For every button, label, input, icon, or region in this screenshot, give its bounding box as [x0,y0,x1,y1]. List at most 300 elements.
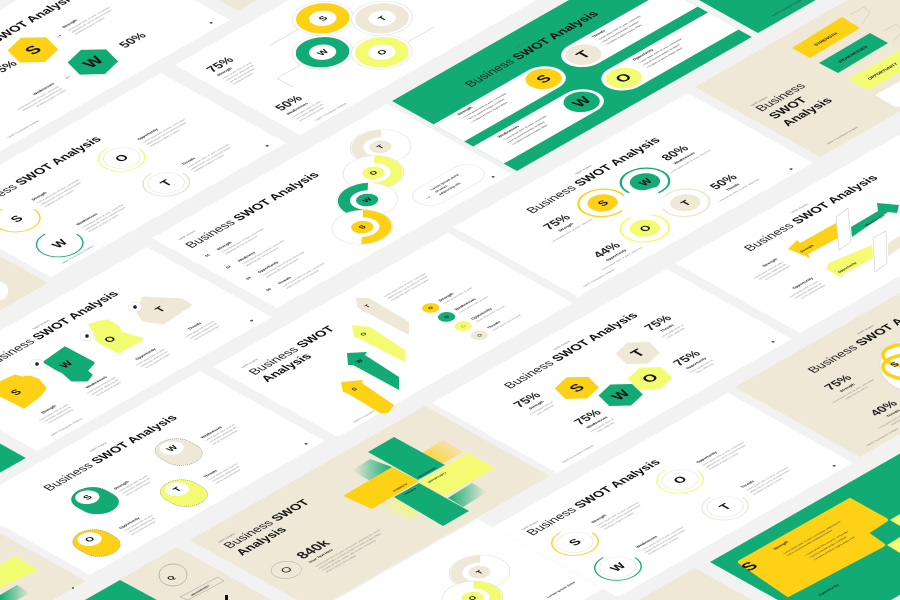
legend opportunity: Lorem ipsum dolor sit amet [474,305,506,323]
text threats: consectetur adipiscing elit, [210,465,241,483]
half ring W: W [360,196,374,204]
strength text: sed do eiusmod tempor [763,265,791,281]
stat strength: 75% [821,373,855,392]
hexagon T: T [628,347,649,360]
weaknesses stat: Weaknesses [32,82,56,96]
stacked arrow chart [341,298,409,413]
page number [265,145,269,147]
pill S: S [81,493,95,501]
text weaknesses: Weaknesses [75,213,99,226]
text strength: Lorem ipsum dolor sit amet, [117,474,150,493]
label: SWOT Analysis [574,164,594,175]
tag strength: STRENGTH [392,483,409,492]
ring W [280,28,365,76]
title: Business [752,81,809,113]
text strength: adipiscing elit, sed do eiusmod tempor [39,181,82,206]
text threats: adipiscing elit, sed do eiusmod tempor [189,146,232,170]
footer: SWOT Presentation Template [825,125,860,145]
text strength: Strength [591,514,608,524]
stat weaknesses: Lorem ipsum dolor sit [589,418,615,432]
callout text: Lorem ipsum dolor [546,581,577,599]
footer: SWOT Presentation Template [6,119,41,139]
panel: green four pills slide [392,0,752,171]
stacked card [880,339,900,391]
arrow S: S [351,387,360,392]
tag opportunity: OPPORTUNITY [866,62,899,81]
stat weaknesses: 75% [571,408,605,427]
ring T: T [376,14,389,22]
stat threats: amet, adipiscing [666,327,686,339]
text threats: Lorem ipsum dolor sit amet, [207,462,239,481]
piece knob O [80,331,94,341]
pill O: Opportunity [632,48,655,61]
text weaknesses [75,200,132,233]
hexagon W [58,42,127,81]
text strength: Strength [31,191,49,201]
hexagon O [620,361,680,395]
hexagon T [608,336,668,370]
text weaknesses: Lorem ipsum dolor sit amet, [85,376,118,394]
title: Business SWOT Analysis [182,170,323,250]
stat strength: Strength [528,400,546,410]
legend threats: Threats [486,321,502,329]
text weaknesses: Lorem ipsum dolor sit amet, consectetur [80,203,125,229]
icon circle: Q [165,574,177,581]
title: Business SWOT [245,324,338,377]
pill T: Threats [591,29,606,38]
text weaknesses: adipiscing elit, sed do eiusmod tempor [84,206,127,231]
legend strength [418,283,475,315]
footer: SWOT Presentation Template [561,444,595,464]
legend opportunity: Opportunity [470,307,494,320]
circle W: W [49,237,71,250]
panel: left beige slide [0,213,48,417]
pill W: • Ut labore et dolore magna aliqua [510,123,549,146]
list item 02 [225,237,289,273]
fade lime bottom [383,498,420,520]
legend threats: ◇ [475,333,484,338]
text threats: Lorem ipsum dolor sit amet, consectetur [745,466,790,491]
text threats: Threats [740,480,755,489]
icon circle [159,564,187,586]
text strength [591,498,647,530]
stat threats [857,393,900,431]
pill S: S [533,73,556,86]
legend threats [467,310,524,342]
weaknesses stat [272,89,330,122]
pill O: O [612,72,636,85]
circle T [133,164,199,202]
opportunity text: sed do eiusmod tempor [799,284,827,300]
ring T [339,0,425,43]
hexagon O: O [639,372,663,385]
title: Business SWOT Analysis [461,9,602,89]
ring O [339,28,425,76]
pill T [152,475,216,511]
half ring T: T [375,143,387,150]
half ring O [331,149,416,197]
ring O: O [637,224,655,234]
stat strength: Lorem ipsum dolor sit amet, consectetur [831,378,876,404]
panel: green strength card slide [710,428,900,600]
strength stat: consectetur adipiscing elit, [224,64,255,81]
strength stat: Lorem ipsum dolor sit amet, [221,61,253,79]
pill T: T [573,49,595,61]
page number [72,587,74,589]
tag weaknesses: WEAKNESSES [837,45,869,64]
hexagon W [591,378,651,412]
text threats: consectetur adipiscing elit, [188,322,219,340]
stat threats: Threats [725,183,741,192]
list item 03: Lorem ipsum dolor sit amet, consectetur [261,250,306,276]
dark mark [225,595,228,600]
panel: beige stats slide [735,253,900,457]
text strength: Lorem ipsum dolor sit amet, consectetur [595,501,640,526]
stat 840k: 840k [292,537,334,561]
cross chart [343,437,495,526]
stat strength: amet, adipiscing [535,404,556,416]
ring W: W [315,48,331,57]
arrow O: O [360,332,369,337]
text opportunity: incididunt ut labore et dolore [707,452,740,470]
text strength [33,400,77,425]
label: SWOT Analysis [790,202,810,214]
title: Analysis [233,525,290,557]
text opportunity: Opportunity [136,127,160,141]
pill W: • Sed do eiusmod tempor incididunt [506,120,546,143]
pill O [64,525,129,561]
weaknesses stat [8,31,156,115]
arrow T: T [364,304,373,309]
legend weaknesses: Weaknesses [454,298,477,311]
stat strength: adipiscing elit, sed do [844,385,870,400]
circle O: O [112,152,132,164]
tag weaknesses: WEAKNESSES [190,584,211,597]
stat weaknesses: amet, adipiscing [595,421,616,433]
legend strength: O [427,306,436,311]
text threats: Lorem ipsum dolor sit amet, [184,320,216,338]
text opportunity: Lorem ipsum dolor sit amet, [122,514,155,532]
weaknesses stat: adipiscing elit, sed do eiusmod tempor [21,87,64,112]
ring W: W [636,176,656,188]
text opportunity: sed do eiusmod tempor [144,353,171,369]
pill W: W [164,444,181,453]
text weaknesses [200,421,243,445]
pill W [147,434,211,470]
stat opportunity [670,348,718,375]
strength stat: Strength [216,67,234,77]
icon circle [265,558,308,582]
weaknesses stat: 50% [116,31,150,50]
text threats: Threats [181,157,196,166]
panel: top right green slide [633,0,900,33]
card paragraph: • Lorem ipsum dolor sit amet, consectetur [803,530,850,556]
list item 01 [204,225,269,262]
pill O: O [82,535,97,543]
fade green right [448,483,487,507]
list item 04 [265,259,330,296]
pill S [63,483,127,519]
text strength: sed do eiusmod tempor [124,481,152,496]
half ring W [324,176,410,224]
text threats: Lorem ipsum dolor sit amet, consectetur [186,143,231,168]
text threats: sed do eiusmod tempor [193,325,221,341]
pill T: • Ut labore et dolore magna aliqua [604,23,643,46]
list item 04: adipiscing elit, sed do eiusmod [285,269,320,289]
stat threats [641,313,689,340]
piece knob T [128,302,142,312]
bar weaknesses [368,437,445,480]
green block [85,580,157,600]
pill T: T [170,485,184,493]
left bottom beige contents [0,556,74,600]
legend weaknesses: Lorem ipsum dolor sit amet [458,295,490,313]
half ring T: T [474,569,486,575]
text strength: consectetur adipiscing elit, [121,477,152,494]
label: SWOT Analysis [240,357,260,369]
text opportunity: Lorem ipsum dolor sit amet, consectetur [141,118,186,144]
piece W [45,348,93,380]
card paragraph: Lorem ipsum dolor sit amet, consectetur adipiscing elit [782,520,842,554]
swot arrows and tabs [788,203,900,278]
stat opportunity: Opportunity [685,357,708,370]
text opportunity: Opportunity [118,516,142,530]
connector lines [244,0,434,97]
bar strength [343,467,419,509]
stat strength: 75% [540,212,574,232]
text threats: incididunt ut labore et dolore [752,476,785,495]
circle W: W [607,561,630,573]
text strength [113,472,157,496]
piece S [0,376,45,407]
circle S [542,524,608,561]
piece knob W [30,359,44,369]
panel: left bottom beige slide [0,511,86,600]
stat threats: 40% [867,399,900,418]
text strength: incididunt ut labore et dolore [43,189,76,208]
tag bars [792,7,900,107]
stat 840k: Your Text Here [308,548,334,564]
stat opportunity: Lorem ipsum dolor sit [688,359,714,373]
ring T: T [678,199,695,208]
strength stat: incididunt ut labore et dolore [73,16,106,35]
ring S: S [595,199,612,208]
piece T: T [152,305,169,314]
card heading: Strength [772,540,790,550]
bar threats [394,483,469,526]
text threats: incididunt ut labore et dolore [193,153,226,172]
pill O: • Lorem ipsum dolor sit amet, consectetur [637,38,683,64]
list item 03: Opportunity [257,260,280,274]
page number [250,319,254,322]
stat threats: 50% [707,172,740,191]
pill S: • Sed do eiusmod tempor incididunt [466,98,506,121]
text opportunity: consectetur adipiscing elit, [126,516,157,534]
text weaknesses [635,523,692,555]
hexagon S: S [21,43,46,57]
weaknesses stat: consectetur adipiscing elit, [294,103,325,120]
text weaknesses: incididunt ut labore et dolore [87,214,120,233]
text weaknesses: consectetur adipiscing elit, [89,378,120,396]
circle O [89,140,155,177]
pill T: • Lorem ipsum dolor sit amet, consectetur [596,15,642,41]
strength stat: 75% [203,55,237,74]
white circle on left beige slide [0,282,8,300]
strength stat [0,3,118,79]
pill S: Strength [457,106,474,116]
weaknesses stat: 50% [272,93,306,113]
text opportunity: sed do eiusmod tempor [129,520,157,536]
title: Business SWOT Analysis [523,135,664,215]
stat opportunity: Opportunity [605,248,628,262]
panel: percent rings slide [453,93,813,297]
stat threats [698,167,761,203]
text threats [203,460,246,484]
stat threats: Threats [660,324,675,333]
pill W: • Lorem ipsum dolor sit amet, consectetur [502,115,548,141]
text opportunity: incididunt ut labore et dolore [148,129,181,147]
label: SWOT Analysis [520,519,540,531]
piece O: O [102,335,119,345]
stat strength [811,367,879,406]
fade green left [352,459,392,481]
label: SWOT Analysis [177,229,197,241]
panel: top beige slide [113,0,473,11]
paragraph: Lorem ipsum dolor sit amet, consectetur [382,272,427,298]
pill S [434,61,575,141]
arrow strength: Strength [799,244,815,253]
opportunity text: Lorem ipsum dolor sit amet, [788,280,820,298]
hexagon S [547,371,607,405]
stat opportunity: 75% [670,349,704,368]
label: SWOT Analysis [513,38,533,49]
title: Business SWOT Analysis [741,173,881,253]
piece O [90,321,142,352]
text strength: sed do eiusmod tempor [47,408,75,424]
text strength [31,176,88,208]
text opportunity [130,345,174,370]
footer: SWOT Presentation Template [60,245,95,264]
circle O: O [670,474,691,486]
text weaknesses: adipiscing elit, sed do eiusmod tempor [643,529,686,553]
hexagon S: S [566,382,589,395]
title: Business SWOT Analysis [523,457,664,537]
circle W [585,549,651,586]
list item 01: 01 [204,253,211,258]
opportunity text: Opportunity [792,276,815,290]
list item 02: Lorem ipsum dolor sit amet, consectetur [241,239,286,265]
half ring T [437,548,522,596]
stat strength: Strength [558,222,575,232]
pill O: • Ut labore et dolore magna aliqua [645,46,684,69]
pill S: • Ut labore et dolore magna aliqua [470,101,509,123]
label: SWOT Analysis [31,319,51,330]
text threats: Threats [187,322,203,331]
stat strength: Lorem ipsum dolor sit [529,400,555,415]
panel: puzzle slide [0,247,272,451]
callout: → [420,193,434,201]
arrow weaknesses: Weaknesses [864,214,886,227]
stat opportunity: amet, adipiscing [694,362,715,374]
tag weaknesses [180,577,224,600]
text weaknesses: incididunt ut labore et dolore [647,536,680,555]
footer: SWOT Presentation Template [352,404,386,423]
text strength: incididunt ut labore et dolore [602,511,635,530]
circle W [27,225,93,262]
legend opportunity [451,301,508,333]
callout: sit amet, [433,184,449,193]
weaknesses stat: Lorem ipsum dolor sit amet, [290,100,323,118]
text weaknesses: sed do eiusmod tempor [211,429,239,445]
circle T: T [716,501,735,512]
page number [832,465,836,467]
page number [789,168,793,170]
strength text: consectetur adipiscing elit, [757,263,788,280]
text opportunity: Opportunity [134,347,158,361]
half ring O [430,574,515,600]
pill O [592,12,739,96]
stat weaknesses: Weaknesses [673,152,696,165]
paragraph: Lorem ipsum dolor sit amet, consectetur adipiscing elit, sed do [314,528,382,567]
text threats: adipiscing elit, sed do eiusmod tempor [748,469,791,493]
arrow W: W [355,358,366,364]
footer: SWOT Presentation Template [49,417,84,437]
stat strength: 75% [510,390,544,409]
fade yellow top [422,440,463,465]
strength stat: Strength [61,19,79,29]
stat opportunity: Lorem ipsum dolor sit amet, adipiscing [600,246,644,271]
weaknesses stat: sed do eiusmod tempor [297,106,325,122]
text strength: consectetur adipiscing elit, [42,405,73,423]
list item 04: Threats [277,276,293,285]
title: Business SWOT [220,498,313,550]
strength text [747,257,792,283]
text threats: Threats [203,469,218,478]
strength stat: sed do eiusmod tempor [228,67,256,83]
paragraph: adipiscing elit, sed do eiusmod tempor [386,275,429,300]
list item 04: Lorem ipsum dolor sit amet, consectetur [281,262,326,287]
hexagon W: W [79,54,109,71]
title: SWOT [765,95,811,121]
label: SWOT Analysis [88,441,109,452]
bottom beige slide contents [85,564,228,600]
list item 02: 02 [225,265,232,269]
letter S: S [737,560,762,574]
legend weaknesses [434,292,491,324]
panel: arrows and tabs slide [675,129,900,333]
footer: SWOT Presentation Template [865,427,900,447]
legend strength: Lorem ipsum dolor sit amet [442,286,474,304]
paragraph: Ut enim ad minim veniam, quis nostrud exercitation [321,539,378,571]
list item 01: Strength [216,241,234,251]
pill W: W [569,95,596,110]
text strength: Lorem ipsum dolor sit amet, [38,403,70,421]
card paragraph: • Sed do eiusmod tempor incididunt [808,536,848,559]
title: Analysis [779,95,836,128]
pill T: • Sed do eiusmod tempor incididunt [600,20,640,43]
pill S: • Lorem ipsum dolor sit amet, consectetur [461,92,508,119]
stat weaknesses [649,138,712,174]
stat strength [531,207,594,243]
strength stat: Lorem ipsum dolor sit amet, consectetur [66,6,111,31]
stat threats: Lorem ipsum dolor sit amet, adipiscing [717,178,761,203]
text strength: adipiscing elit, sed do eiusmod tempor [599,504,642,528]
text weaknesses [80,373,125,398]
hexagon W: W [608,388,635,403]
panel: pill circles slide [0,371,325,575]
list item 03 [245,248,309,285]
checker lime bottom [887,537,900,553]
